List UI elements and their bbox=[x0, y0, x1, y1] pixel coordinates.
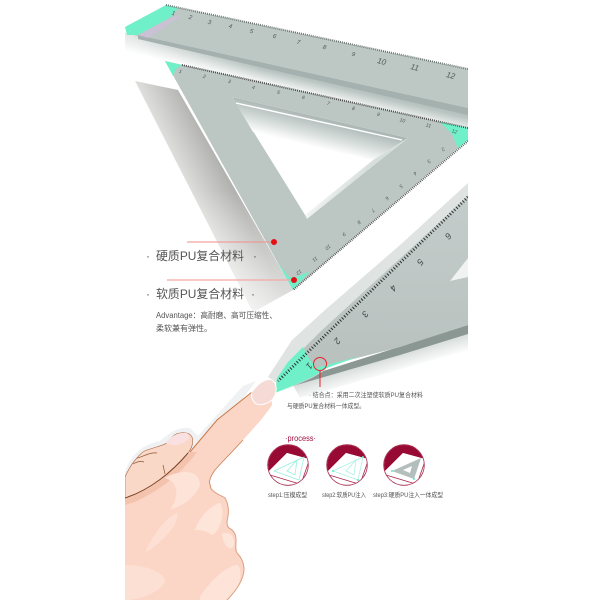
label: hard PU material: · bbox=[253, 249, 257, 263]
large ruler triangle: 1 bbox=[304, 361, 315, 371]
ruler set illustration bbox=[125, 5, 468, 600]
thumb bbox=[125, 433, 193, 498]
set square triangle: 10 bbox=[323, 243, 332, 251]
set square triangle: 9 bbox=[340, 231, 347, 237]
set square triangle: 8 bbox=[351, 106, 356, 112]
top ruler: 4 bbox=[228, 24, 233, 31]
large ruler triangle: 5 bbox=[414, 257, 426, 268]
text block: advantage: Advantage：高耐磨、高可压缩性、 bbox=[156, 310, 277, 320]
callout: soft PU pointer bbox=[167, 277, 297, 283]
set square triangle: 4 bbox=[251, 85, 256, 91]
set square triangle: 8 bbox=[355, 219, 362, 225]
top ruler: 5 bbox=[249, 29, 254, 36]
label: hard PU material: · bbox=[146, 249, 150, 263]
set square triangle: 6 bbox=[301, 95, 306, 101]
set square triangle: 10 bbox=[399, 117, 406, 125]
callout: hard PU pointer bbox=[187, 239, 277, 245]
set square triangle: 6 bbox=[383, 195, 390, 201]
label: step 1: step1:压模成型 bbox=[268, 490, 307, 499]
text block: advantage bbox=[156, 310, 277, 333]
icon: step 2 bbox=[325, 443, 369, 487]
set square triangle: 12 bbox=[294, 268, 303, 276]
top ruler: 1 bbox=[171, 11, 176, 17]
large ruler triangle: 2 bbox=[332, 335, 343, 346]
large ruler triangle bbox=[268, 183, 468, 398]
text block: advantage: 柔软兼有弹性。 bbox=[156, 323, 212, 333]
set square triangle: 7 bbox=[326, 101, 331, 107]
set square triangle: 3 bbox=[227, 79, 232, 85]
index finger nail bbox=[252, 380, 276, 405]
set square triangle: 1 bbox=[178, 69, 183, 75]
top ruler: 10 bbox=[376, 56, 388, 67]
set square triangle: 9 bbox=[376, 112, 381, 118]
text block: bonding point: 与硬质PU复合材料一体成型。 bbox=[287, 401, 365, 410]
large ruler triangle: 3 bbox=[360, 309, 371, 319]
large ruler triangle: 6 bbox=[443, 231, 454, 241]
set square triangle: 7 bbox=[369, 207, 376, 213]
set square triangle: 2 bbox=[439, 145, 446, 152]
large ruler triangle: 4 bbox=[388, 283, 399, 293]
top ruler: 3 bbox=[207, 20, 212, 27]
label: soft PU material: 软质PU复合材料 bbox=[156, 286, 244, 301]
top ruler: 11 bbox=[409, 62, 420, 73]
label: soft PU material: · bbox=[146, 287, 150, 301]
top ruler: 8 bbox=[322, 45, 327, 52]
set square triangle: 5 bbox=[397, 183, 404, 189]
set square triangle: 2 bbox=[201, 74, 207, 80]
set square triangle: 12 bbox=[451, 128, 458, 136]
top ruler: 6 bbox=[272, 34, 277, 41]
hand halo bbox=[125, 382, 256, 476]
label: soft PU material: · bbox=[251, 287, 255, 301]
hand bbox=[125, 380, 276, 600]
text block: bonding point: · 结合点：采用二次注塑使软质PU复合材料 bbox=[309, 390, 424, 399]
triangle opening bbox=[232, 97, 408, 219]
index finger and palm bbox=[125, 389, 272, 600]
text block: bonding point bbox=[287, 390, 424, 410]
heading: process: ·process· bbox=[285, 434, 316, 443]
top ruler: 7 bbox=[296, 40, 301, 47]
set square triangle: 3 bbox=[425, 158, 432, 164]
set square triangle: 5 bbox=[276, 90, 281, 96]
thumb nail bbox=[166, 433, 189, 445]
top ruler: 9 bbox=[351, 52, 356, 59]
top ruler: 2 bbox=[187, 14, 193, 22]
hand shadows and highlights bbox=[125, 452, 197, 505]
label: hard PU material: 硬质PU复合材料 bbox=[156, 248, 244, 263]
icon: step 3 bbox=[382, 443, 426, 487]
callout: bonding point marker bbox=[314, 358, 326, 387]
label: step 3: step3:硬质PU注入一体成型 bbox=[373, 490, 443, 499]
set square triangle: 11 bbox=[425, 122, 432, 130]
top ruler bbox=[125, 5, 468, 130]
set square triangle bbox=[165, 61, 468, 290]
set square triangle: 4 bbox=[411, 170, 418, 176]
icon: step 1 bbox=[266, 443, 310, 487]
top ruler: 12 bbox=[445, 70, 457, 81]
label: step 2: step2:软质PU注入 bbox=[322, 490, 366, 499]
back shadow panel bbox=[135, 81, 293, 312]
set square triangle: 11 bbox=[311, 255, 319, 263]
